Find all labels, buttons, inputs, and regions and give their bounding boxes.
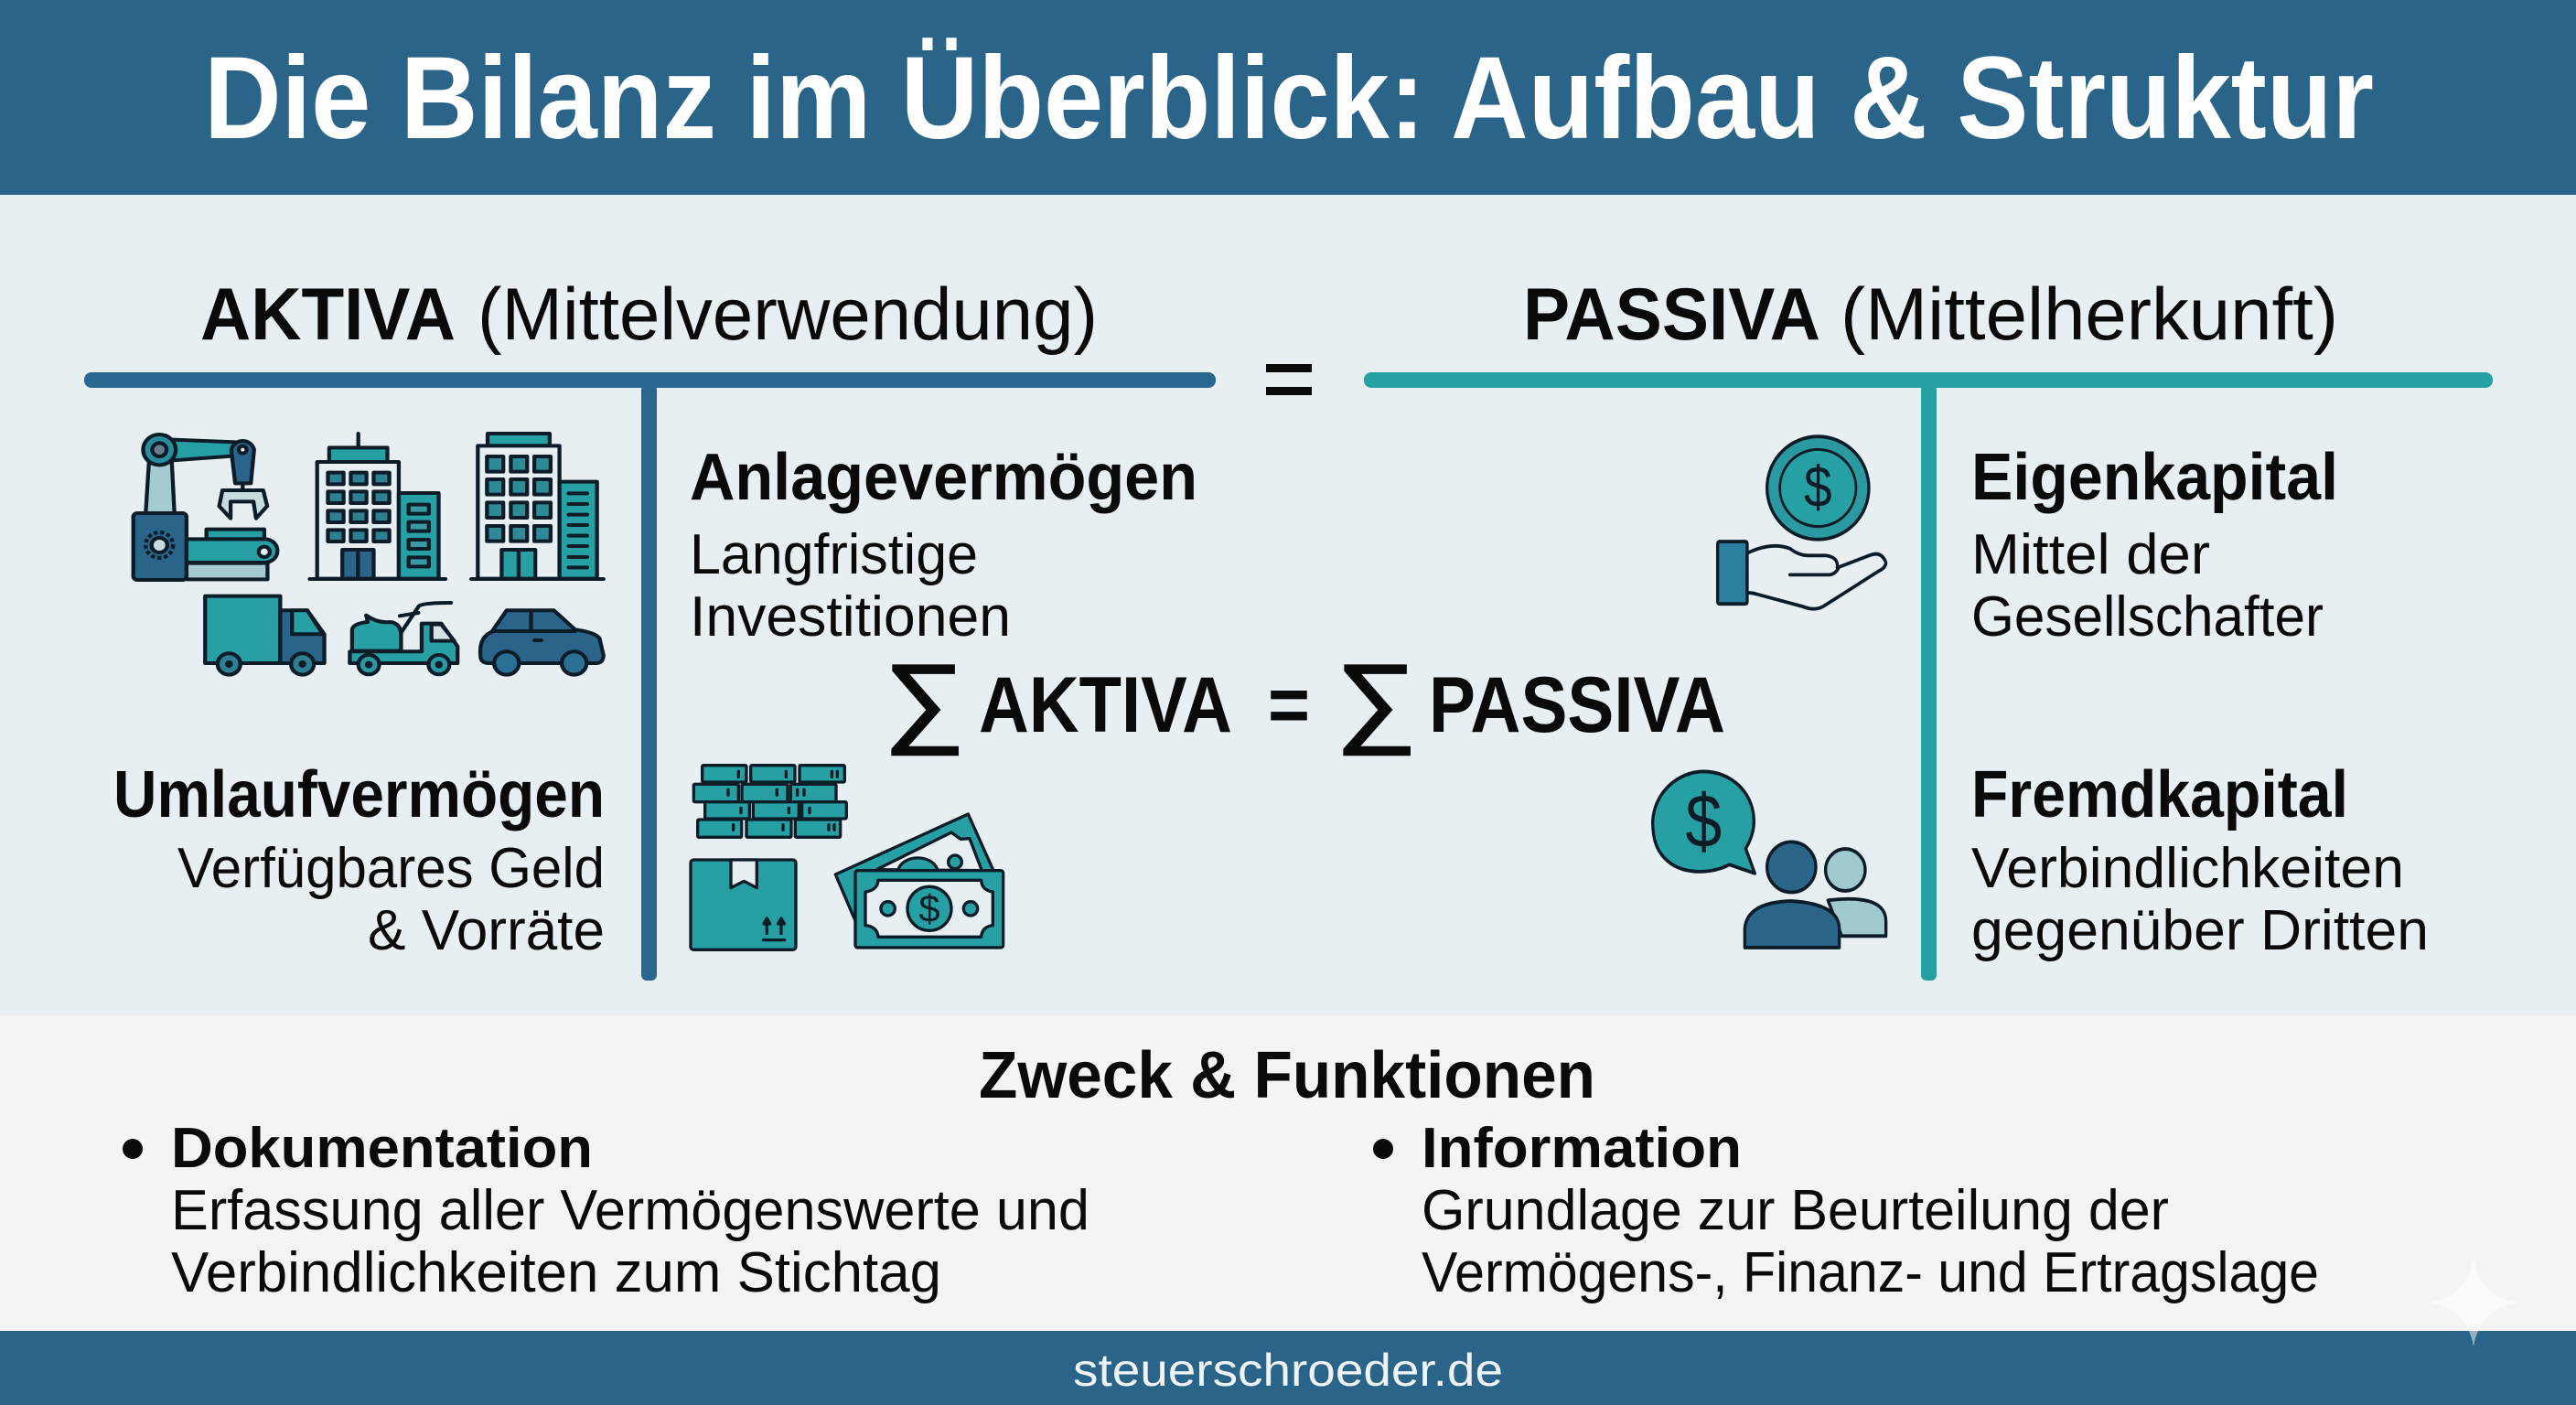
- balance equation: AKTIVA: [979, 661, 1232, 749]
- text: Anlagevermögen description: [690, 523, 1011, 649]
- icon: office building tall: [471, 434, 604, 579]
- text: Anlagevermögen description: Langfristige: [690, 523, 978, 586]
- icon: small pickup truck: [349, 603, 457, 674]
- icon: hand holding coin: [1718, 436, 1886, 609]
- text: Eigenkapital description: [1971, 523, 2324, 649]
- panel: aktiva: [84, 273, 1216, 981]
- heading: passiva: PASSIVA: [1523, 273, 1820, 356]
- balance equation: ∑: [884, 644, 964, 755]
- heading: aktiva: AKTIVA: [200, 273, 456, 356]
- equals sign between columns: [1266, 364, 1312, 395]
- panel: Zweck und Funktionen: [0, 1015, 2576, 1331]
- text: Fremdkapital description: [1971, 837, 2429, 962]
- list item: Information: Grundlage zur Beurteilung der: [1422, 1179, 2169, 1242]
- header band: [0, 0, 2576, 195]
- text: Umlaufvermögen description: & Vorräte: [368, 899, 605, 962]
- icon: speech bubble with people: $: [1685, 780, 1722, 863]
- heading: passiva: [1523, 273, 2338, 356]
- icon: banknotes: $: [918, 886, 940, 929]
- list item: Information: Vermögens-, Finanz- und Ertragslage: [1422, 1241, 2319, 1304]
- icon: banknotes: [835, 814, 1004, 948]
- icon: delivery truck: [205, 596, 325, 675]
- heading: aktiva: [200, 273, 1098, 356]
- icon: cardboard box: [691, 860, 796, 949]
- text: Eigenkapital description: Gesellschafter: [1971, 585, 2324, 649]
- list item: Information: Information: [1422, 1117, 1742, 1180]
- heading: Zweck und Funktionen: Zweck & Funktionen: [979, 1039, 1595, 1112]
- heading: aktiva: (Mittelverwendung): [478, 273, 1098, 356]
- icon: car: [480, 610, 604, 675]
- list item: Dokumentation: Verbindlichkeiten zum Stichtag: [171, 1241, 941, 1304]
- text: Fremdkapital description: gegenüber Dritten: [1971, 899, 2429, 962]
- panel: passiva: [1364, 273, 2493, 981]
- T-account frame: passiva: [1364, 372, 2493, 981]
- heading: passiva: (Mittelherkunft): [1841, 273, 2338, 356]
- footer url: steuerschroeder.de: [1073, 1345, 1503, 1396]
- icon: stacked bricks: [693, 766, 846, 837]
- list item: Dokumentation: Dokumentation: [171, 1117, 593, 1180]
- title: Die Bilanz im Überblick: Aufbau & Struktur: [204, 33, 2374, 164]
- icon: hand holding coin: $: [1804, 455, 1832, 520]
- balance equation: [884, 644, 1725, 755]
- heading: Eigenkapital: Eigenkapital: [1971, 441, 2338, 514]
- list item: Information: [1373, 1117, 2319, 1304]
- heading: Fremdkapital: Fremdkapital: [1971, 758, 2348, 831]
- footer band: [0, 1331, 2576, 1405]
- watermark star: [2430, 1259, 2517, 1346]
- text: Umlaufvermögen description: [177, 837, 605, 962]
- balance equation: ∑: [1336, 644, 1416, 755]
- balance equation: PASSIVA: [1429, 661, 1725, 749]
- icon: factory robot arm: [134, 434, 277, 580]
- heading: Anlagevermögen: Anlagevermögen: [690, 441, 1197, 514]
- T-account frame: aktiva: [84, 372, 1216, 981]
- list item: Dokumentation: [123, 1117, 1089, 1304]
- heading: Umlaufvermögen: Umlaufvermögen: [113, 758, 605, 831]
- icon: office building small: [309, 434, 445, 579]
- icon: speech bubble with people: [1653, 771, 1886, 948]
- text: Eigenkapital description: Mittel der: [1971, 523, 2210, 586]
- balance equation: =: [1268, 661, 1310, 749]
- text: Umlaufvermögen description: Verfügbares Geld: [177, 837, 605, 900]
- text: Anlagevermögen description: Investitionen: [690, 585, 1011, 649]
- text: Fremdkapital description: Verbindlichkeiten: [1971, 837, 2404, 900]
- list item: Dokumentation: Erfassung aller Vermögenswerte und: [171, 1179, 1089, 1242]
